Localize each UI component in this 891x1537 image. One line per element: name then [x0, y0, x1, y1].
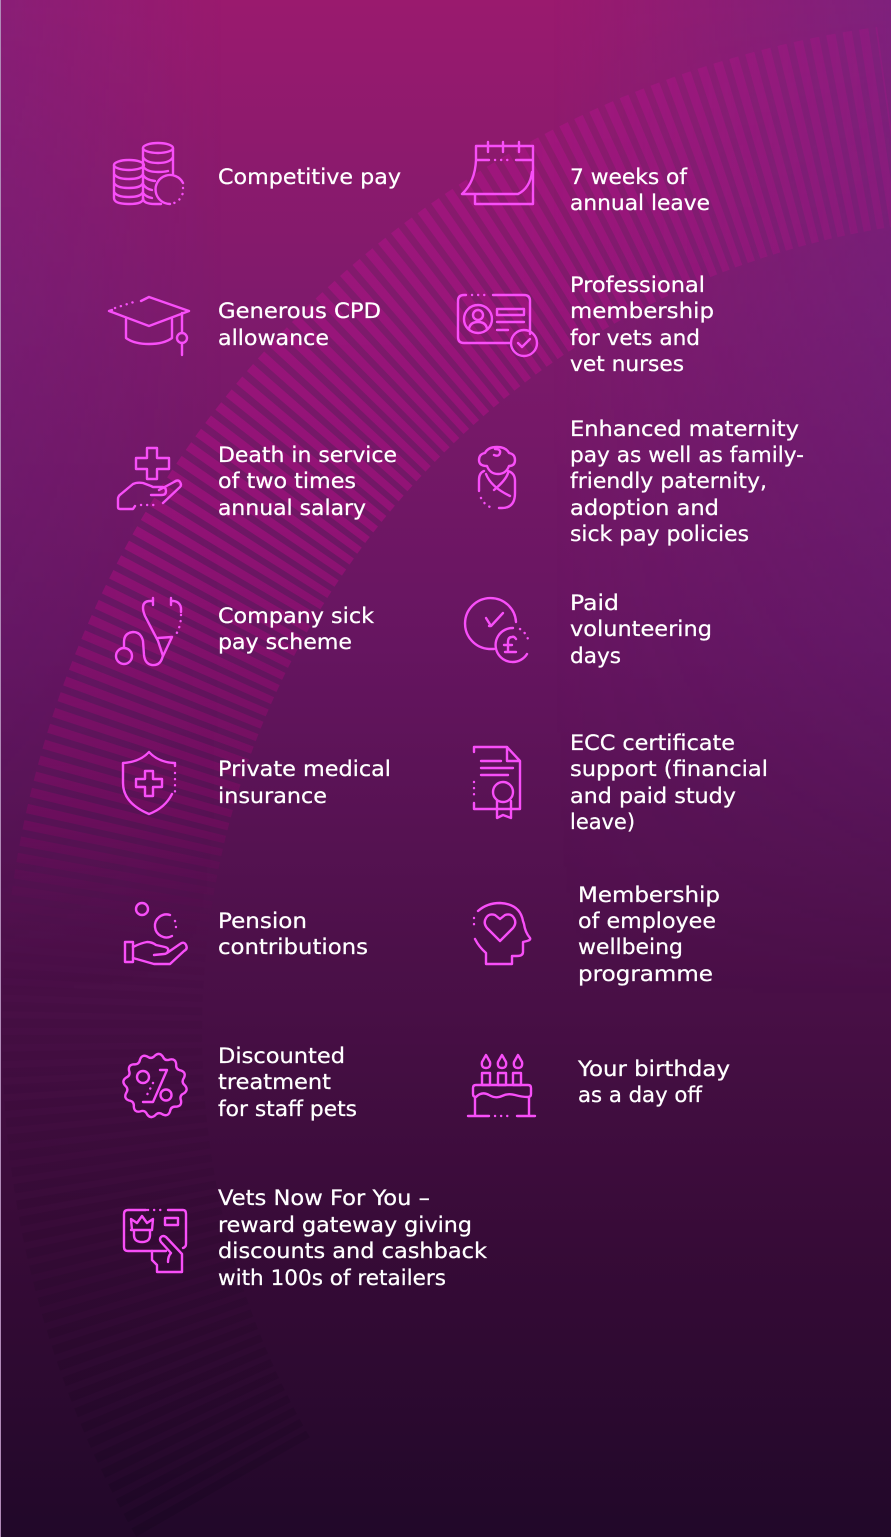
text: medical insurance: insurance [218, 784, 327, 808]
text: annual leave: annual leave [570, 191, 710, 215]
text: professional membership: for vets and [570, 326, 700, 350]
text: medical insurance: Private medical [218, 757, 391, 781]
text: CPD: Generous CPD [218, 299, 381, 323]
text: professional membership: Professional [570, 273, 705, 297]
text: maternity pay: pay as well as family- [570, 443, 804, 467]
text: pets: Discounted [218, 1044, 345, 1068]
text: ECC: leave) [570, 810, 635, 834]
text: volunteering: Paid [570, 591, 619, 615]
text: sick pay: Company sick [218, 604, 375, 628]
text: sick pay: pay scheme [218, 630, 352, 654]
icon: hand with cross [118, 448, 181, 509]
text: pension: contributions [218, 935, 368, 959]
text: wellbeing: Membership [578, 883, 720, 907]
text: pets: for staff pets [218, 1097, 357, 1121]
icon: membership card [458, 295, 537, 356]
icon: calendar [462, 142, 533, 204]
text: volunteering: days [570, 644, 621, 668]
left edge line [0, 0, 1, 1537]
text: volunteering: volunteering [570, 617, 712, 641]
icon: certificate [474, 747, 520, 818]
text: death in service: of two times [218, 469, 356, 493]
text: pets: treatment [218, 1070, 331, 1094]
text: ECC: and paid study [570, 784, 736, 808]
text: maternity pay: Enhanced maternity [570, 417, 799, 441]
text: volunteering [570, 591, 712, 668]
icon: reward card with hand [124, 1210, 186, 1272]
text: CPD [218, 299, 381, 350]
text: ECC [570, 731, 768, 834]
icon: clock and pound [465, 598, 529, 662]
icon: birthday cake [468, 1055, 535, 1116]
text: death in service: annual salary [218, 496, 366, 520]
text: pension [218, 909, 368, 959]
text: wellbeing: wellbeing [578, 935, 683, 959]
text: medical insurance [218, 757, 391, 808]
icon: stethoscope [116, 598, 181, 665]
text: wellbeing [578, 883, 720, 986]
striped arc background [16, 27, 891, 872]
text: wellbeing: of employee [578, 909, 716, 933]
text: maternity pay: friendly paternity, [570, 469, 767, 493]
text: birthday: as a day off [578, 1083, 703, 1107]
text: professional membership: membership [570, 299, 714, 323]
text: sick pay [218, 604, 375, 654]
text: professional membership: vet nurses [570, 352, 684, 376]
icon: head with heart [474, 903, 530, 964]
text: maternity pay [570, 417, 804, 546]
text: annual leave: 7 weeks of [570, 165, 688, 189]
text: ECC: ECC certificate [570, 731, 735, 755]
text: rewards: discounts and cashback [218, 1239, 488, 1263]
icon: discount badge [123, 1054, 187, 1117]
text: professional membership [570, 273, 714, 376]
icon: coins [114, 143, 183, 204]
text: ECC: support (financial [570, 757, 768, 781]
text: death in service: Death in service [218, 443, 397, 467]
text: rewards: with 100s of retailers [218, 1266, 446, 1290]
text: competitive pay: Competitive pay [218, 165, 401, 189]
text: CPD: allowance [218, 326, 329, 350]
text: maternity pay: adoption and [570, 496, 719, 520]
text: birthday [577, 1057, 730, 1107]
icon: shield [123, 752, 175, 814]
text: maternity pay: sick pay policies [570, 522, 749, 546]
text: annual leave [570, 165, 710, 215]
text: rewards [218, 1186, 488, 1290]
text: pets [218, 1044, 357, 1121]
text: wellbeing: programme [578, 962, 713, 986]
icon: hand with coins [125, 903, 187, 964]
text: pension: Pension [218, 909, 307, 933]
text: rewards: Vets Now For You – [218, 1186, 430, 1210]
icon: graduation cap [109, 297, 189, 355]
icon: swaddled baby [479, 447, 515, 508]
text: death in service [218, 443, 397, 520]
text: rewards: reward gateway giving [218, 1213, 472, 1237]
text: birthday: Your birthday [577, 1057, 730, 1081]
